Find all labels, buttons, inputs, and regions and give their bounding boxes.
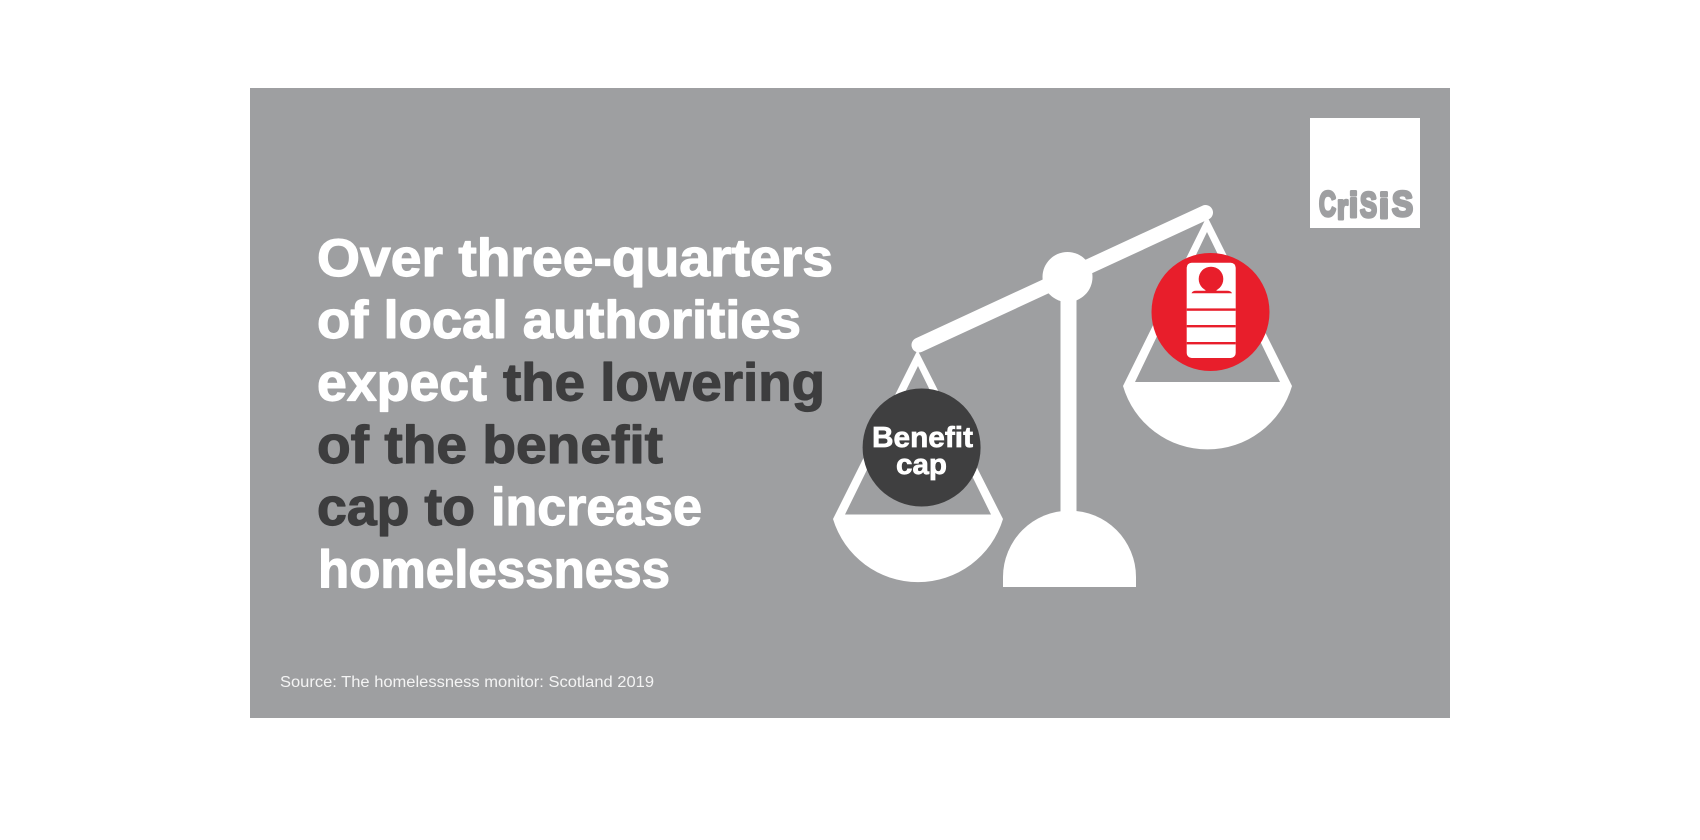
- source note: Source: The homelessness monitor: Scotland 2019: [280, 674, 654, 691]
- weight: benefit cap: [863, 388, 981, 506]
- logo: Crisis: [1310, 118, 1420, 228]
- balance scale: [833, 212, 1292, 587]
- post: [1060, 277, 1076, 517]
- weight: benefit cap: cap: [896, 449, 947, 481]
- weight: red circle with person mattress icon: [1152, 253, 1270, 371]
- headline: homelessness: [318, 540, 670, 600]
- headline: of local authorities: [317, 291, 801, 350]
- headline: Over three-quarters: [317, 229, 833, 288]
- logo: Crisis: r: [1337, 188, 1348, 227]
- logo: Crisis: C: [1319, 185, 1336, 224]
- logo: Crisis: S: [1360, 186, 1377, 225]
- headline: [317, 229, 833, 600]
- headline: increase: [491, 478, 702, 537]
- logo: Crisis: S: [1392, 185, 1413, 224]
- panel: grey background: [250, 88, 1450, 718]
- logo: Crisis: i: [1379, 187, 1389, 226]
- weight: benefit cap: Benefit: [872, 422, 973, 454]
- logo: Crisis: i: [1349, 186, 1358, 225]
- headline: cap to: [317, 478, 475, 537]
- pivot: [1042, 252, 1092, 302]
- left pan: [833, 350, 1003, 582]
- beam: [919, 212, 1206, 345]
- headline: of the benefit: [317, 416, 663, 475]
- right pan: [1123, 216, 1292, 449]
- headline: the lowering: [503, 354, 825, 412]
- headline: expect: [317, 354, 487, 412]
- base: [1003, 511, 1136, 587]
